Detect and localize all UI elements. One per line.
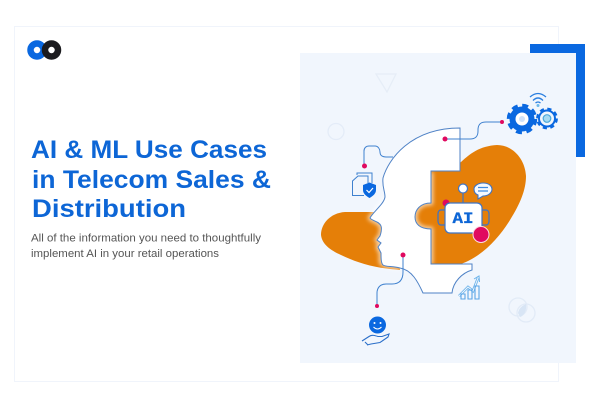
title: in Telecom Sales & xyxy=(32,166,271,194)
subtitle: implement AI in your retail operations xyxy=(31,248,220,260)
soft white glow around head edge xyxy=(370,172,431,268)
subtitle xyxy=(31,232,262,260)
pink node xyxy=(442,200,450,206)
chat bubble xyxy=(474,183,492,199)
blue corner bracket xyxy=(530,44,585,157)
robot head xyxy=(445,203,482,233)
AI robot badge xyxy=(438,183,492,242)
AI label: AI xyxy=(452,210,474,228)
connector: head to smile icon xyxy=(375,252,406,308)
connector: head to gears xyxy=(442,120,504,142)
logo xyxy=(30,44,58,56)
orange puzzle bump xyxy=(415,203,432,229)
pink circle xyxy=(473,226,489,242)
head silhouette xyxy=(370,128,472,293)
robot antenna xyxy=(458,184,468,204)
panel: illustration background xyxy=(300,53,576,363)
decorative circle xyxy=(328,124,344,140)
title: AI & ML Use Cases xyxy=(31,136,267,164)
connector: head to document xyxy=(362,146,393,168)
outer frame xyxy=(14,26,558,382)
icon: document with shield xyxy=(352,173,376,198)
title xyxy=(31,136,271,223)
title: Distribution xyxy=(32,195,186,223)
decorative overlapping circles xyxy=(509,298,535,322)
icon: gears and wifi xyxy=(508,94,557,132)
decorative triangle xyxy=(376,74,396,92)
robot ears xyxy=(438,210,489,225)
icon: growth chart xyxy=(459,276,480,299)
icon: smiling face on hand xyxy=(362,316,389,345)
orange blob: right xyxy=(431,145,526,265)
subtitle: All of the information you need to thoughtfully xyxy=(31,232,262,244)
orange blob: left xyxy=(321,212,400,270)
